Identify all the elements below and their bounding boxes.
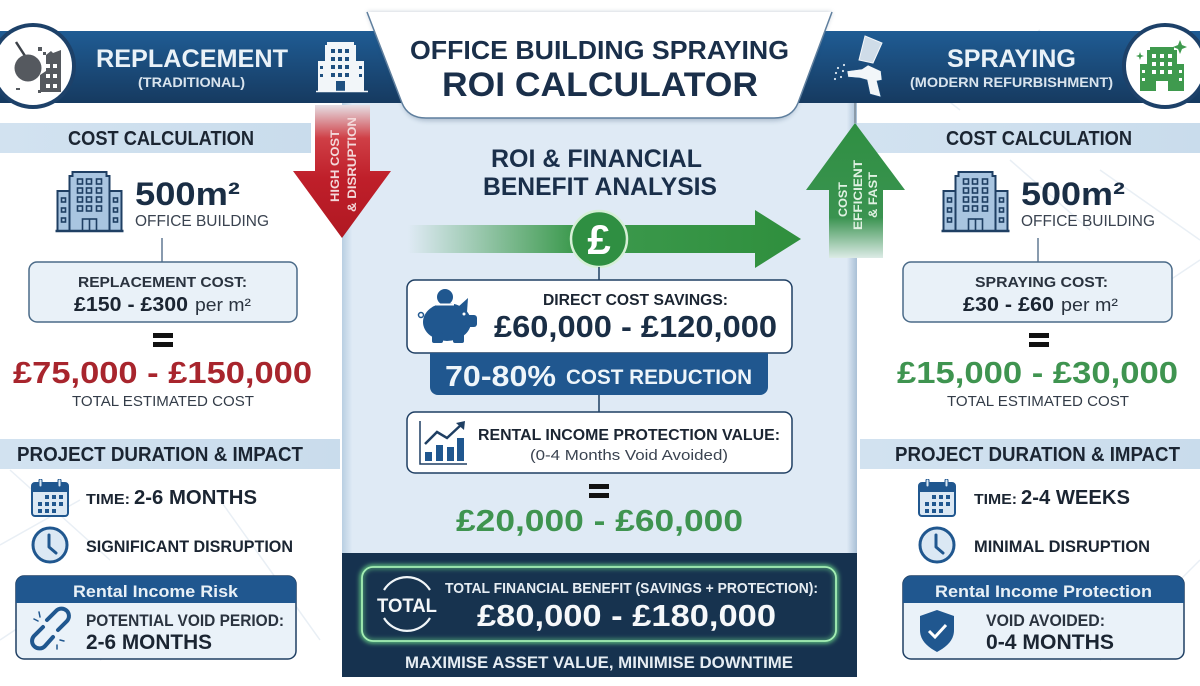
panel: centre [342,103,857,555]
centre heading: BENEFIT ANALYSIS [483,173,717,201]
heading: project duration [860,439,1200,469]
icon: broken chain [32,609,69,649]
equals sign [153,333,173,347]
card: rental income risk: 2-6 MONTHS [86,631,212,654]
total spraying cost: £15,000 - £30,000 [897,355,1178,390]
heading: cost calculation: COST CALCULATION [946,128,1132,150]
icon: green building [1124,25,1200,107]
time: 2-4 WEEKS [1021,487,1130,509]
icon: building [56,172,124,231]
panel: total financial benefit: MAXIMISE ASSET VALUE, MINIMISE DOWNTIME [405,653,793,672]
time: TIME: [974,491,1017,508]
card: replacement cost: per m² [195,295,251,315]
panel: total financial benefit: £80,000 - £180,000 [477,598,776,633]
arrow: cost efficient and fast: EFFICIENT [851,159,865,230]
card: rental income risk: Rental Income Risk [73,582,239,601]
card: rental income protection value: RENTAL INCOME PROTECTION VALUE: [478,427,780,444]
centre heading: ROI & FINANCIAL [491,145,702,173]
icon: total badge [377,577,437,631]
panel: total financial benefit: TOTAL FINANCIAL BENEFIT (SAVINGS + PROTECTION): [445,580,818,597]
card: rental income risk: POTENTIAL VOID PERIOD: [86,611,284,630]
icon: wrecking ball [0,25,74,107]
time [974,487,1130,509]
card: rental income protection value: (0-4 Months Void Avoided) [530,447,728,464]
header: spraying: SPRAYING [947,45,1076,73]
header: replacement: (TRADITIONAL) [138,74,245,90]
band: cost reduction [430,353,768,395]
building size: OFFICE BUILDING [135,213,269,230]
arrow: high cost and disruption [293,105,391,238]
arrow: high cost and disruption: & DISRUPTION [345,117,359,212]
total replacement cost [13,355,312,410]
icon: total badge: TOTAL [377,596,437,617]
icon: clock [920,528,954,562]
panel: total financial benefit [342,553,857,677]
arrow: high cost and disruption: HIGH COST [328,129,342,202]
header: spraying [790,25,1200,107]
card: spraying cost [903,262,1172,322]
icon: clock [33,528,67,562]
icon: pound coin: £ [587,216,611,263]
card: rental income protection: Rental Income Protection [935,582,1152,601]
arrow: cost efficient and fast: COST [836,181,850,217]
header: replacement [0,25,410,107]
arrow: cost efficient and fast [806,103,905,258]
total replacement cost: £75,000 - £150,000 [13,355,312,390]
card: rental income protection value [407,412,792,473]
time: TIME: [86,491,130,508]
icon: spray gun [834,36,882,97]
building size: 500m² [1021,176,1125,212]
band: cost reduction: COST REDUCTION [566,366,752,389]
heading: cost calculation [857,123,1200,153]
building size: 500m² [135,176,240,212]
heading: project duration: PROJECT DURATION & IMPACT [17,444,303,466]
card: rental income protection: 0-4 MONTHS [986,631,1114,654]
panel: spraying cost calculation [857,123,1200,410]
icon: office block [316,42,368,92]
building size [135,176,269,230]
card: direct cost savings [407,280,792,353]
building size: OFFICE BUILDING [1021,213,1155,230]
header: replacement: REPLACEMENT [96,45,288,73]
icon: growth chart [420,421,467,464]
card: direct cost savings: £60,000 - £120,000 [494,309,777,344]
icon: pound coin [571,211,627,267]
band: cost reduction: 70-80% [445,361,556,393]
heading: project duration: PROJECT DURATION & IMPACT [895,444,1180,466]
card: spraying cost: SPRAYING COST: [975,274,1108,291]
panel: spraying duration and impact [860,439,1200,659]
icon: calendar [32,479,68,516]
card: direct cost savings: DIRECT COST SAVINGS: [543,292,728,309]
icon: piggy bank [418,289,477,343]
card: replacement cost: £150 - £300 [74,294,188,316]
total spraying cost: TOTAL ESTIMATED COST [947,393,1129,410]
panel: replacement duration and impact [0,439,340,659]
icon: shield [920,610,954,652]
card: replacement cost [29,262,297,322]
total replacement cost: TOTAL ESTIMATED COST [72,393,254,410]
card: rental income risk [16,576,296,659]
card: replacement cost: REPLACEMENT COST: [78,274,247,291]
heading: cost calculation: COST CALCULATION [68,128,254,150]
icon: building [942,172,1010,231]
heading: project duration [0,439,340,469]
card: rental income protection: VOID AVOIDED: [986,611,1105,630]
equals sign [1029,333,1049,347]
disruption: SIGNIFICANT DISRUPTION [86,537,293,556]
disruption: MINIMAL DISRUPTION [974,537,1150,556]
arrow: savings flow [408,210,801,268]
card: rental income protection [903,576,1184,659]
total spraying cost [897,355,1178,410]
centre heading [483,145,717,201]
protection value amount: £20,000 - £60,000 [456,503,743,538]
arrow: cost efficient and fast: & FAST [866,171,880,218]
title plate: OFFICE BUILDING SPRAYING [410,35,789,65]
equals sign [589,484,609,498]
time: 2-6 MONTHS [134,487,257,509]
building size [1021,176,1155,230]
card: spraying cost: per m² [1061,295,1118,315]
heading: cost calculation [0,123,311,153]
icon: calendar [919,479,955,516]
title plate [367,12,832,121]
card: spraying cost: £30 - £60 [963,294,1054,316]
header: spraying: (MODERN REFURBISHMENT) [910,74,1113,90]
title plate: ROI CALCULATOR [442,66,758,104]
panel: replacement cost calculation [0,123,312,410]
